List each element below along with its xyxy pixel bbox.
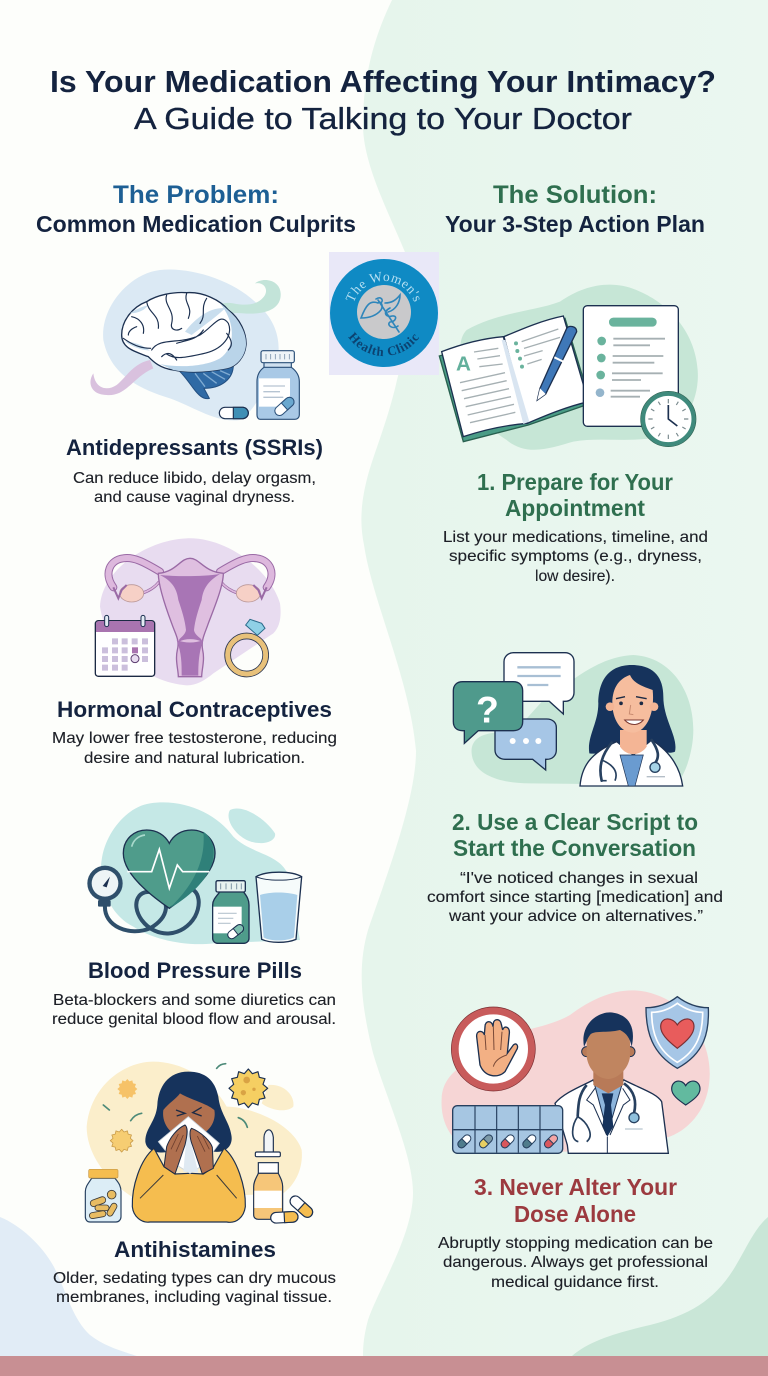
text: antihistamines: [53, 1237, 336, 1306]
text: step 2: Start the Conversation: [453, 835, 696, 861]
text: antidepressants: and cause vaginal dryness.: [94, 489, 295, 506]
title: [50, 64, 716, 136]
icon: green bottle: [213, 881, 249, 943]
icon: uterus, calendar and ring: [95, 538, 281, 685]
icon: book, checklist and clock: [439, 285, 698, 450]
icon: pollen: [103, 1064, 268, 1152]
icon: stop hand, male doctor, shield and pill organiser: [442, 990, 710, 1153]
icon: woman sneezing, allergens and medicines: [85, 1062, 315, 1223]
text: step 2: [427, 809, 723, 925]
icon: heart: [123, 830, 215, 908]
text: step 3: medical guidance first.: [491, 1274, 659, 1291]
text: step 3: Dose Alone: [514, 1201, 636, 1227]
icon: small green heart: [672, 1081, 700, 1105]
heading: the problem: Common Medication Culprits: [36, 211, 356, 237]
icon: speech bubbles and female doctor: [453, 653, 693, 786]
text: antidepressants: Can reduce libido, delay orgasm,: [73, 470, 316, 487]
heading: the problem: The Problem:: [113, 181, 279, 209]
icon: caduceus: [361, 295, 400, 332]
icon: brain and pill bottle: [90, 269, 299, 420]
heading: the problem: [36, 181, 356, 237]
icon: female doctor: [580, 665, 683, 786]
icon: white speech bubble: [504, 653, 574, 714]
text: blood pressure pills: Beta-blockers and some diuretics can: [53, 992, 336, 1009]
text: hormonal contraceptives: Hormonal Contraceptives: [57, 697, 332, 722]
icon: uterus: [109, 558, 271, 677]
background: bottom left blue blob: [0, 1217, 137, 1356]
text: blood pressure pills: reduce genital blood flow and arousal.: [52, 1011, 336, 1028]
footer bar: [0, 1356, 768, 1376]
logo: the women's health clinic: Health Clinic: [348, 332, 419, 356]
text: antihistamines: membranes, including vaginal tissue.: [56, 1289, 332, 1306]
icon: stethoscope tube: [105, 890, 199, 933]
title: A Guide to Talking to Your Doctor: [134, 101, 632, 136]
text: antidepressants: [66, 435, 323, 506]
icon: capsule jar: [85, 1169, 121, 1222]
icon: checklist: [583, 306, 678, 426]
icon: teal question bubble: [453, 682, 523, 743]
text: antihistamines: Older, sedating types can dry mucous: [53, 1270, 336, 1287]
background: bottom right green blob: [572, 1217, 768, 1356]
text: step 1: List your medications, timeline, and: [443, 529, 708, 546]
icon: pressure gauge: [87, 866, 123, 907]
icon: blue speech bubble: [495, 719, 556, 770]
background: right green wave: [361, 0, 768, 1356]
icon: open book: A: [456, 353, 471, 376]
icon: nasal spray: [254, 1130, 283, 1219]
text: hormonal contraceptives: May lower free testosterone, reducing: [52, 730, 337, 747]
text: antihistamines: Antihistamines: [114, 1237, 276, 1262]
logo: the women's health clinic: [329, 252, 439, 375]
text: blood pressure pills: Blood Pressure Pills: [88, 958, 302, 983]
icon: capsule: [219, 407, 248, 419]
icon: diamond ring: [228, 619, 266, 674]
text: step 2: comfort since starting [medication] and: [427, 889, 723, 906]
icon: shield with heart: [646, 997, 708, 1068]
text: step 3: 3. Never Alter Your: [474, 1174, 677, 1200]
icon: pen: [537, 326, 577, 400]
icon: woman: [132, 1072, 245, 1222]
text: blood pressure pills: [52, 958, 336, 1028]
icon: teal question bubble: ?: [476, 689, 499, 731]
icon: two capsules: [270, 1194, 315, 1223]
icon: heart, blood pressure gauge, bottle and water: [87, 802, 302, 944]
icon: calendar: [95, 615, 155, 676]
icon: pill organiser: [453, 1106, 563, 1153]
text: step 1: [443, 469, 708, 585]
icon: clock: [641, 391, 696, 447]
icon: open book: [439, 316, 591, 442]
heading: the solution: [445, 181, 705, 237]
icon: male doctor: [555, 1012, 668, 1153]
text: step 3: dangerous. Always get professional: [443, 1254, 708, 1271]
icon: glass of water: [256, 872, 302, 942]
text: step 3: [438, 1174, 713, 1291]
title: Is Your Medication Affecting Your Intimacy?: [50, 64, 716, 99]
icon: pill bottle: [257, 351, 299, 419]
text: step 1: specific symptoms (e.g., dryness,: [449, 548, 702, 565]
text: step 2: want your advice on alternatives.”: [448, 908, 703, 925]
text: step 1: Appointment: [505, 495, 645, 521]
text: step 3: Abruptly stopping medication can be: [438, 1235, 713, 1252]
text: step 1: 1. Prepare for Your: [477, 469, 673, 495]
text: antidepressants: Antidepressants (SSRIs): [66, 435, 323, 460]
text: hormonal contraceptives: [52, 697, 337, 767]
icon: stop hand sign: [451, 1007, 535, 1091]
text: hormonal contraceptives: desire and natural lubrication.: [84, 750, 305, 767]
text: step 2: 2. Use a Clear Script to: [452, 809, 698, 835]
logo: the women's health clinic: The Women's: [346, 272, 420, 302]
heading: the solution: The Solution:: [493, 181, 657, 209]
text: step 2: “I've noticed changes in sexual: [460, 870, 698, 887]
heading: the solution: Your 3-Step Action Plan: [445, 211, 705, 237]
text: step 1: low desire).: [535, 568, 615, 585]
